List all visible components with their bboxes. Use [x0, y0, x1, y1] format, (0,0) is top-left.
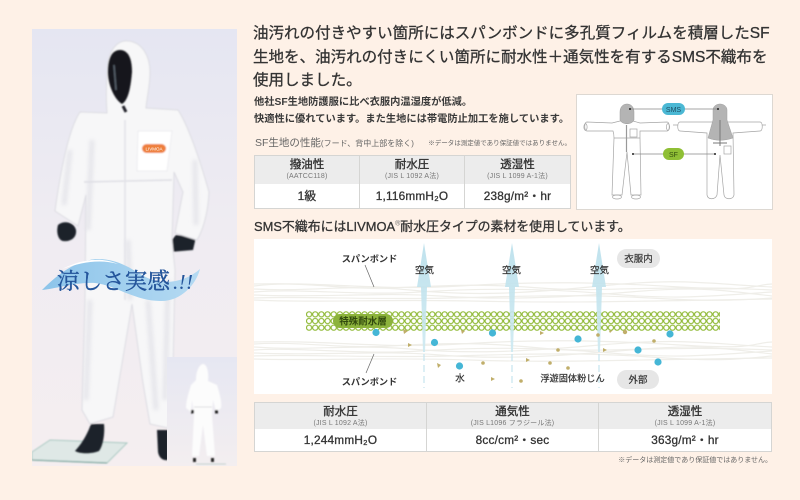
text block: comfort description: 快適性に優れています。また生地には帯電防止加工を施しています。	[254, 114, 569, 124]
text block: comfort description: 他社SF生地防護服に比べ衣服内温湿度が低減。	[254, 97, 472, 108]
table: SMS fabric performance: 8cc/cm²・sec	[476, 433, 549, 447]
heading: intro text: 生地を、油汚れの付きにくい箇所に耐水性＋通気性を有するSMS不織布を	[253, 48, 767, 66]
diagram: coverall material map	[576, 94, 773, 210]
table: SF fabric performance: (AATCC118)	[286, 173, 328, 180]
table: SF fabric performance: 1級	[298, 189, 316, 203]
label: spunbond bottom	[342, 354, 397, 387]
heading: intro text: 油汚れの付きやすい箇所にはスパンボンドに多孔質フィルムを積層したSF	[253, 25, 770, 42]
mannequin and coverall	[55, 41, 209, 460]
air arrow 1	[417, 243, 431, 388]
inset: back view photo	[167, 357, 237, 466]
table: SMS fabric performance: 透湿性	[668, 406, 702, 418]
table: SMS fabric performance: 1,244mmH₂O	[304, 433, 377, 447]
badge: cool feeling wave with slogan	[42, 259, 200, 301]
diagram: fabric cross section	[254, 239, 772, 394]
heading: intro text	[253, 24, 770, 89]
label: water: 水	[455, 372, 465, 384]
table: SF fabric performance: (JIS L 1099 A-1法)	[487, 173, 548, 180]
heading: SMS non-woven section: SMS不織布にはLIVMOA®耐水圧タイプの素材を使用しています。	[254, 219, 631, 234]
table: SF fabric performance: 透湿性	[500, 159, 535, 171]
table caption: SF fabric performance: SF生地の性能(フード、背中上部を除く)	[255, 137, 414, 149]
SF callout	[632, 148, 716, 160]
SF callout: SF	[669, 152, 678, 159]
front coverall outline	[584, 121, 670, 199]
dust particles	[403, 329, 656, 383]
heading: intro text: 使用しました。	[253, 72, 362, 89]
table: SF fabric performance	[254, 155, 571, 209]
table caption: SF fabric performance: ※データは測定値であり保証値ではありません。	[428, 140, 571, 147]
label: inside clothing	[617, 249, 660, 268]
table: SMS fabric performance: (JIS L1096 フラジール法)	[471, 420, 554, 427]
panel: product photo	[32, 29, 237, 466]
front hood SMS area	[620, 104, 634, 124]
coverall folds and details	[64, 50, 196, 410]
table: SMS fabric performance: 363g/m²・hr	[651, 433, 719, 447]
upper spunbond layer	[254, 282, 772, 302]
label: spunbond top: スパンボンド	[342, 253, 397, 264]
water resistant mesh layer	[306, 311, 720, 331]
label: outside	[617, 370, 659, 389]
SMS callout: SMS	[666, 107, 681, 114]
badge: cool feeling wave with slogan: 涼しさ実感	[57, 269, 170, 294]
back coverall outline	[673, 122, 766, 199]
table: SF fabric performance: 1,116mmH₂O	[376, 189, 448, 203]
text block: comfort description	[254, 96, 569, 124]
label: special water resistant layer: 特殊耐水層	[339, 316, 387, 328]
table: SF fabric performance: 耐水圧	[395, 159, 429, 171]
labels: air: 空気	[415, 264, 434, 276]
label: inside clothing: 衣服内	[624, 253, 653, 265]
label: spunbond top	[342, 253, 397, 287]
back yoke and hood SMS area	[708, 104, 733, 140]
glass plate	[32, 440, 127, 463]
table: SMS fabric performance: (JIS L 1099 A-1法)	[655, 420, 715, 427]
labels: air: 空気	[502, 264, 521, 276]
table: SMS fabric performance: (JIS L 1092 A法)	[313, 420, 368, 427]
label: special water resistant layer	[333, 314, 393, 328]
table: SF fabric performance: 撥油性	[290, 159, 324, 171]
air arrow 3	[592, 243, 606, 388]
coverall folds and details: LIVMOA	[145, 146, 163, 152]
labels: air: 空気	[590, 264, 609, 276]
table caption: SF fabric performance	[255, 137, 571, 149]
table: SF fabric performance: (JIS L 1092 A法)	[385, 173, 439, 180]
labels: air	[415, 264, 609, 276]
table: SMS fabric performance: 耐水圧	[323, 406, 358, 418]
footnote: ※データは測定値であり保証値ではありません。	[618, 457, 772, 464]
air arrow 2	[505, 243, 519, 388]
table: SMS fabric performance	[254, 402, 772, 452]
lower spunbond layer	[254, 341, 772, 361]
table: SF fabric performance: 238g/m²・hr	[484, 189, 551, 203]
water droplets	[372, 329, 674, 370]
SMS callout	[629, 103, 719, 115]
label: outside: 外部	[628, 374, 648, 386]
label: spunbond bottom: スパンボンド	[342, 376, 397, 387]
badge: cool feeling wave with slogan: .!!	[173, 270, 193, 294]
label: airborne solid dust: 浮遊固体粉じん	[540, 372, 605, 384]
table: SMS fabric performance: 通気性	[495, 406, 530, 418]
